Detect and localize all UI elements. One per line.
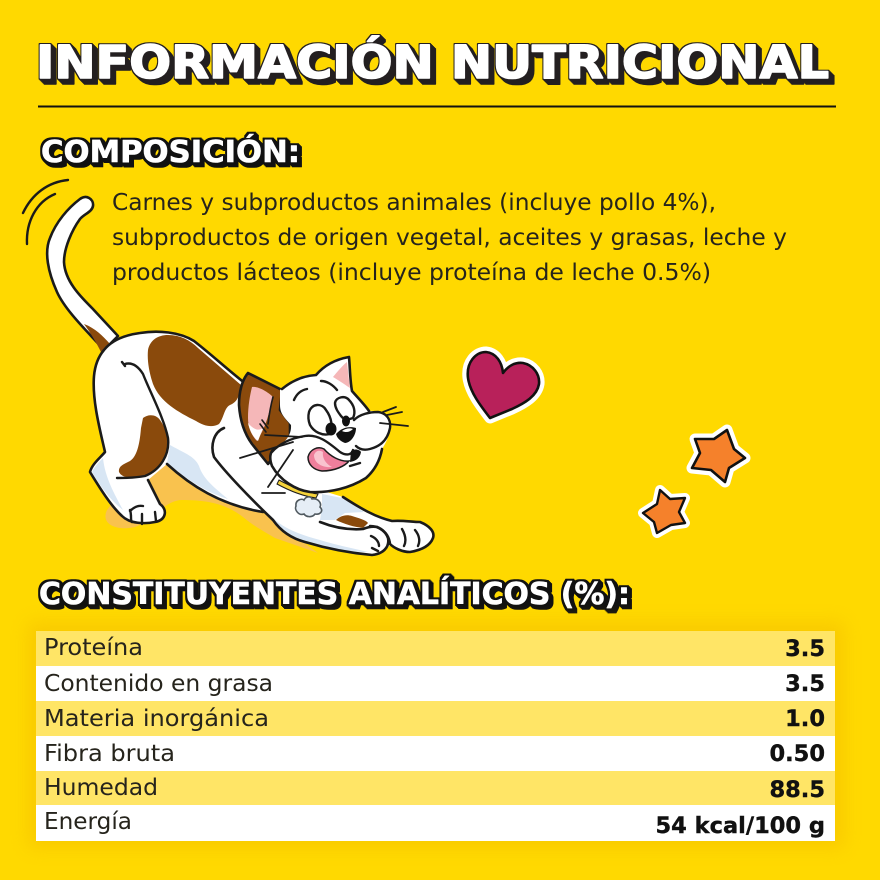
motion lines — [23, 180, 68, 244]
body fill — [90, 332, 300, 523]
tail — [47, 197, 118, 352]
text block: composition: subproductos de origen vegetal, aceites y grasas, leche y — [112, 223, 787, 251]
row: energía: Energía — [44, 807, 132, 835]
row: humedad — [36, 771, 835, 805]
nose — [336, 427, 356, 443]
heading: composición: COMPOSICIÓN: — [41, 133, 300, 170]
row: proteína — [36, 631, 835, 666]
collar — [277, 480, 318, 498]
text block: composition — [112, 188, 787, 286]
text block: composition: Carnes y subproductos animales (incluye pollo 4%), — [112, 188, 716, 216]
hind paw lines — [130, 506, 156, 524]
nose highlight — [342, 428, 353, 432]
brown arm patch — [336, 515, 368, 528]
brown thigh patch — [119, 415, 168, 477]
row: proteína: 3.5 — [785, 636, 825, 662]
row: fibra bruta — [36, 736, 835, 771]
icon: large star — [692, 430, 745, 482]
ear and brown head patch — [239, 373, 290, 464]
tongue highlight — [314, 451, 332, 467]
row: materia inorgánica: Materia inorgánica — [44, 704, 269, 732]
text block: composition: productos lácteos (incluye proteína de leche 0.5%) — [112, 258, 711, 286]
eyes — [308, 397, 354, 435]
row: energía: 54 kcal/100 g — [656, 813, 825, 839]
hind leg line — [117, 362, 168, 478]
head outline — [270, 357, 382, 492]
row: contenido en grasa: 3.5 — [785, 671, 825, 697]
row: materia inorgánica: 1.0 — [785, 706, 825, 732]
row: contenido en grasa — [36, 666, 835, 701]
inner left ear — [248, 387, 273, 441]
right arm line — [343, 497, 433, 552]
heading: constituyentes analíticos: CONSTITUYENTES ANALÍTICOS (%): — [39, 576, 630, 612]
collar tag — [296, 497, 322, 517]
mouth — [350, 449, 361, 462]
body shading — [92, 445, 228, 510]
body outline — [90, 332, 263, 523]
row: contenido en grasa: Contenido en grasa — [44, 669, 273, 697]
inner right ear — [333, 362, 350, 388]
row: humedad: Humedad — [44, 773, 158, 801]
arm shading — [270, 494, 368, 552]
head fill — [270, 357, 391, 492]
whiskers — [240, 407, 408, 493]
pupils — [326, 416, 350, 436]
row: proteína: Proteína — [44, 633, 143, 661]
icon: small star — [643, 490, 685, 533]
tongue — [308, 448, 349, 471]
table: analytical constituents — [28, 622, 844, 848]
ear fur lines — [260, 397, 273, 432]
arms fill — [213, 440, 433, 555]
row: energía — [36, 805, 835, 841]
row: fibra bruta: 0.50 — [769, 741, 825, 767]
ground shadow — [105, 462, 318, 553]
brow lines — [294, 381, 337, 400]
chest and left arm line — [212, 428, 388, 555]
brown back patch — [148, 335, 241, 426]
illustration: cat stretching — [23, 180, 433, 555]
icon: heart — [468, 352, 539, 418]
row: humedad: 88.5 — [769, 777, 825, 803]
row: fibra bruta: Fibra bruta — [44, 739, 175, 767]
row: materia inorgánica — [36, 701, 835, 736]
muzzle lines — [272, 412, 390, 466]
title: INFORMACIÓN NUTRICIONAL — [36, 36, 829, 89]
paw lines — [371, 529, 419, 551]
ear white strip — [248, 423, 263, 441]
